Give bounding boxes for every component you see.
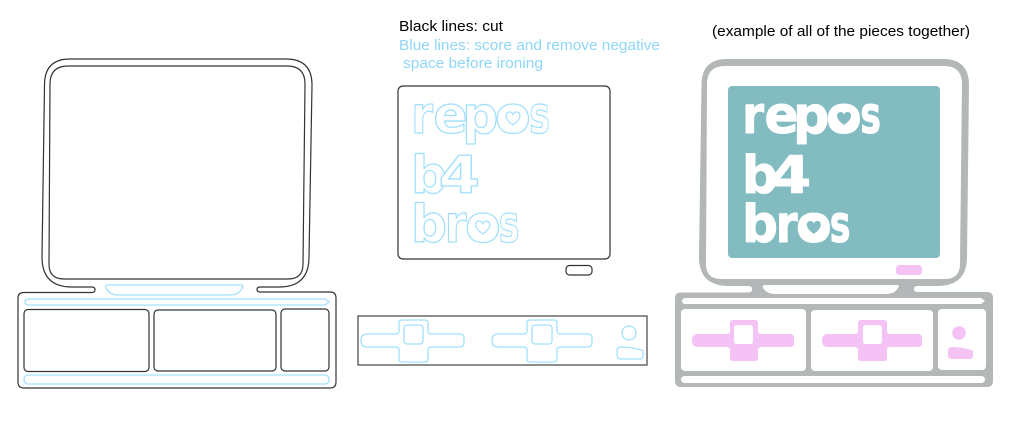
heart in bros bbox=[804, 218, 824, 238]
cross shape left bbox=[361, 320, 464, 362]
top bar cut-out bbox=[25, 299, 329, 305]
person head bbox=[622, 326, 636, 340]
instructions text bbox=[399, 19, 660, 72]
logo outline: o bbox=[465, 195, 501, 255]
panel: screen cut pattern bbox=[398, 86, 610, 275]
black lines note: Black lines: cut bbox=[399, 19, 503, 35]
pink cross right bbox=[822, 320, 922, 361]
logo outline: r bbox=[411, 86, 433, 146]
bottom bar cut-out bbox=[24, 375, 329, 384]
keypad rectangle bbox=[358, 316, 647, 365]
logo outline: 4 bbox=[439, 146, 480, 206]
logo text: 4 bbox=[770, 146, 811, 206]
logo text: r bbox=[776, 195, 798, 255]
square hole right bbox=[532, 325, 552, 344]
heart in repos bbox=[503, 108, 523, 128]
caption: example note: (example of all of the pieces together) bbox=[712, 24, 970, 40]
white stand slot bbox=[763, 285, 899, 294]
logo outline bbox=[411, 86, 550, 255]
keypad cell left bbox=[24, 310, 149, 372]
pink cross left bbox=[692, 320, 794, 361]
pink person body bbox=[948, 347, 973, 359]
logo outline: b bbox=[411, 146, 447, 206]
logo outline: b bbox=[411, 195, 447, 255]
blue lines note: Blue lines: score and remove negative bbox=[399, 38, 660, 54]
white keypad cell middle bbox=[811, 310, 933, 371]
panel: monitor and base cut pattern bbox=[18, 59, 336, 388]
white top bar bbox=[682, 298, 985, 304]
power button bbox=[566, 266, 592, 275]
panel: assembled example bbox=[675, 59, 993, 387]
teal screen bbox=[728, 86, 940, 258]
square hole left bbox=[404, 325, 423, 344]
logo outline: o bbox=[495, 86, 531, 146]
logo text: o bbox=[796, 195, 832, 255]
white screen area bbox=[706, 66, 962, 279]
logo text: r bbox=[742, 86, 764, 146]
monitor and base outer outline bbox=[18, 59, 336, 388]
logo outline: r bbox=[445, 195, 467, 255]
logo outline: p bbox=[462, 86, 498, 146]
logo text: b bbox=[742, 195, 778, 255]
logo outline: s bbox=[529, 86, 550, 146]
logo text: b bbox=[742, 146, 778, 206]
white keypad cell left bbox=[681, 309, 806, 371]
monitor screen outline bbox=[49, 66, 305, 279]
cross shape right bbox=[492, 320, 592, 362]
keypad cell middle bbox=[154, 310, 276, 371]
heart in repos bbox=[834, 108, 854, 128]
keypad cell right bbox=[281, 309, 329, 371]
heart in bros bbox=[473, 218, 493, 238]
logo outline: e bbox=[433, 86, 468, 146]
pink power button bbox=[896, 265, 922, 275]
logo text: o bbox=[826, 86, 862, 146]
logo text bbox=[742, 86, 881, 255]
screen rectangle bbox=[398, 86, 610, 259]
white keypad cell right bbox=[938, 309, 986, 370]
logo text: e bbox=[764, 86, 799, 146]
logo outline: s bbox=[499, 195, 520, 255]
stand cut-out bbox=[106, 285, 243, 295]
person body bbox=[617, 347, 643, 359]
white bottom bar bbox=[681, 376, 985, 383]
logo text: p bbox=[793, 86, 829, 146]
logo text: s bbox=[860, 86, 881, 146]
panel: keypad cut pattern bbox=[358, 316, 647, 365]
blue lines note continued: space before ironing bbox=[403, 56, 543, 72]
gray monitor and base body bbox=[675, 59, 993, 387]
pink person head bbox=[952, 326, 966, 340]
logo text: s bbox=[830, 195, 850, 255]
